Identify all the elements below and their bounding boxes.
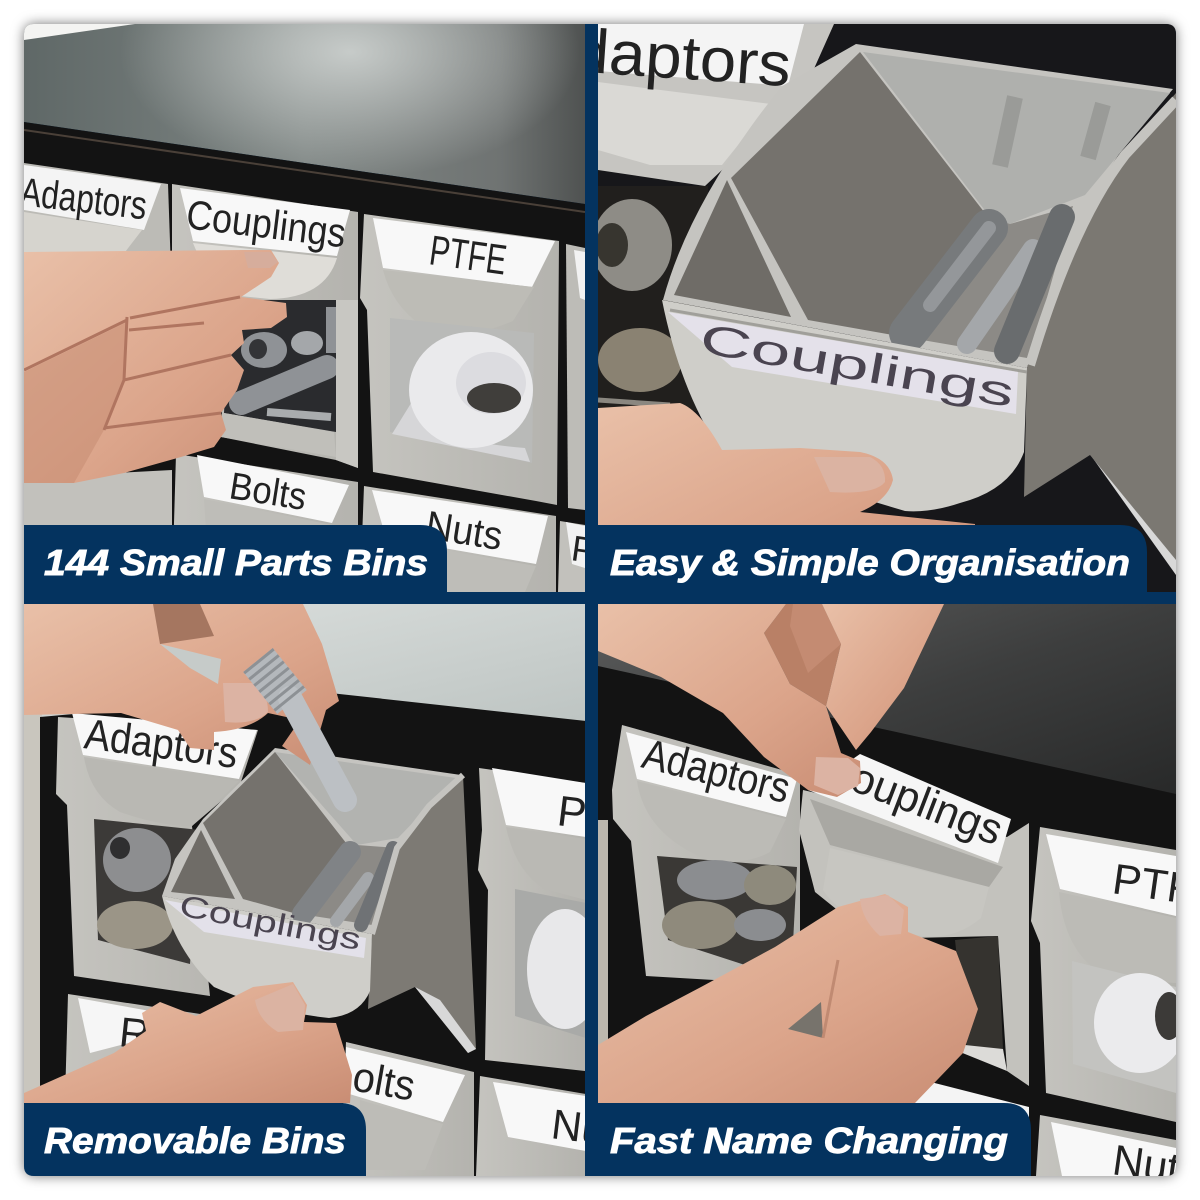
opening rim bbox=[663, 44, 1173, 368]
label slot bbox=[165, 900, 366, 958]
PTF drawer bbox=[1031, 827, 1197, 1122]
flap bbox=[823, 848, 989, 937]
pulled bin bbox=[162, 748, 476, 1053]
hand holding bin bbox=[598, 403, 975, 525]
front bbox=[162, 896, 372, 1018]
couplings drawer bbox=[799, 754, 1029, 1086]
pulled out bin bbox=[662, 44, 1176, 575]
adaptors drawer: Adaptors bbox=[18, 170, 149, 228]
hand lifting label bbox=[598, 604, 944, 797]
hand holding fitting bbox=[24, 604, 345, 800]
cabinet top surface bbox=[42, 604, 585, 721]
adaptors drawer: Adaptors bbox=[638, 730, 795, 813]
lifted name label: ouplings bbox=[844, 754, 1009, 855]
bolts drawer: olts bbox=[349, 1053, 419, 1110]
nut drawer: Nut bbox=[1110, 1136, 1183, 1193]
nu drawer: Nu bbox=[549, 1100, 608, 1153]
black cabinet front bbox=[24, 122, 585, 592]
cabinet top surface bbox=[598, 604, 1176, 804]
right side wall bbox=[1024, 93, 1176, 560]
window with fittings bbox=[94, 819, 200, 964]
inner wall bbox=[203, 752, 350, 914]
right wall bbox=[368, 775, 476, 1053]
nuts drawer: Nuts bbox=[423, 503, 506, 559]
bin front face bbox=[662, 300, 1027, 511]
caption: removable bins: Removable Bins bbox=[44, 1120, 346, 1161]
caption: easy and simple organisation: Easy & Simple Organisation bbox=[610, 542, 1130, 583]
window bbox=[955, 936, 1003, 1049]
bolts drawer bbox=[340, 1042, 474, 1176]
nut drawer bbox=[1036, 1115, 1183, 1193]
PT drawer: PT bbox=[555, 787, 615, 842]
adaptors bin top left: Adaptors bbox=[527, 13, 793, 100]
window with ring bbox=[515, 889, 585, 1038]
central inner wall bbox=[731, 52, 988, 335]
bin interior with fittings bbox=[224, 300, 336, 432]
metal fitting bbox=[258, 660, 345, 800]
fittings in bin bbox=[303, 848, 393, 925]
black cabinet background bbox=[598, 24, 1176, 592]
cabinet top surface bbox=[24, 24, 585, 204]
fittings behind bbox=[592, 186, 708, 411]
couplings drawer: Couplings bbox=[184, 191, 348, 256]
hand under bin bbox=[24, 982, 352, 1103]
opening rim bbox=[162, 748, 461, 934]
caption: 144 small parts bins bbox=[24, 525, 447, 592]
window with nuts bbox=[657, 856, 797, 965]
bottom-left drawer bbox=[24, 470, 172, 525]
panel: 144 small parts bins: P bbox=[569, 527, 598, 571]
panel: easy and simple organisation bbox=[598, 24, 1176, 592]
translucent back wall bbox=[275, 752, 456, 845]
surface sheen bbox=[142, 24, 562, 164]
fittings inside bin bbox=[908, 217, 1062, 351]
left inner wall bbox=[674, 180, 791, 317]
caption: removable bins bbox=[24, 1103, 366, 1176]
PTFE drawer bbox=[360, 214, 559, 505]
nu drawer bbox=[476, 1076, 608, 1176]
PTFE drawer: PTFE bbox=[427, 226, 510, 284]
wall strip bbox=[24, 700, 42, 1176]
ri drawer bbox=[66, 994, 200, 1074]
bin floor bbox=[926, 206, 1073, 358]
floor bbox=[300, 845, 397, 925]
adaptors drawer bbox=[56, 710, 258, 996]
pulled bin: Couplings bbox=[177, 889, 364, 957]
label slot bbox=[668, 312, 1018, 414]
pulled out bin: Couplings bbox=[696, 315, 1018, 416]
translucent back wall bbox=[863, 52, 1170, 224]
bolts sliver bbox=[900, 1078, 1029, 1120]
panel: removable bins bbox=[24, 604, 615, 1176]
caption: 144 small parts bins: 144 Small Parts Bins bbox=[44, 542, 428, 583]
hand pressing bin bbox=[598, 894, 978, 1103]
window with ring bbox=[1072, 961, 1186, 1093]
panel: fast name changing bbox=[598, 604, 1197, 1193]
adaptors drawer: Adaptors bbox=[82, 710, 241, 778]
black cabinet front bbox=[40, 692, 586, 1176]
bottom label tip bbox=[1092, 457, 1176, 575]
caption: fast name changing: Fast Name Changing bbox=[610, 1120, 1008, 1161]
far right drawers bbox=[566, 244, 585, 510]
adaptors drawer bbox=[612, 725, 800, 985]
panel: 144 small parts bins bbox=[18, 24, 598, 592]
caption: easy and simple organisation bbox=[586, 525, 1147, 604]
black cabinet front bbox=[598, 666, 1176, 1176]
adaptors bin top left bbox=[598, 24, 834, 186]
bolts drawer bbox=[174, 455, 358, 525]
ri drawer: Ri bbox=[117, 1008, 161, 1059]
wall strip bbox=[598, 820, 608, 1090]
PTF drawer: PTF bbox=[1110, 855, 1197, 914]
adaptors drawer bbox=[24, 163, 170, 252]
nuts drawer bbox=[360, 486, 556, 592]
bolts drawer: Bolts bbox=[227, 465, 309, 519]
couplings drawer bbox=[172, 184, 358, 468]
caption: fast name changing bbox=[586, 1103, 1031, 1176]
PT drawer bbox=[478, 768, 585, 1071]
wall highlight bbox=[24, 24, 135, 40]
clear window with PTFE ring bbox=[390, 318, 534, 463]
hand pulling drawer bbox=[24, 250, 287, 483]
